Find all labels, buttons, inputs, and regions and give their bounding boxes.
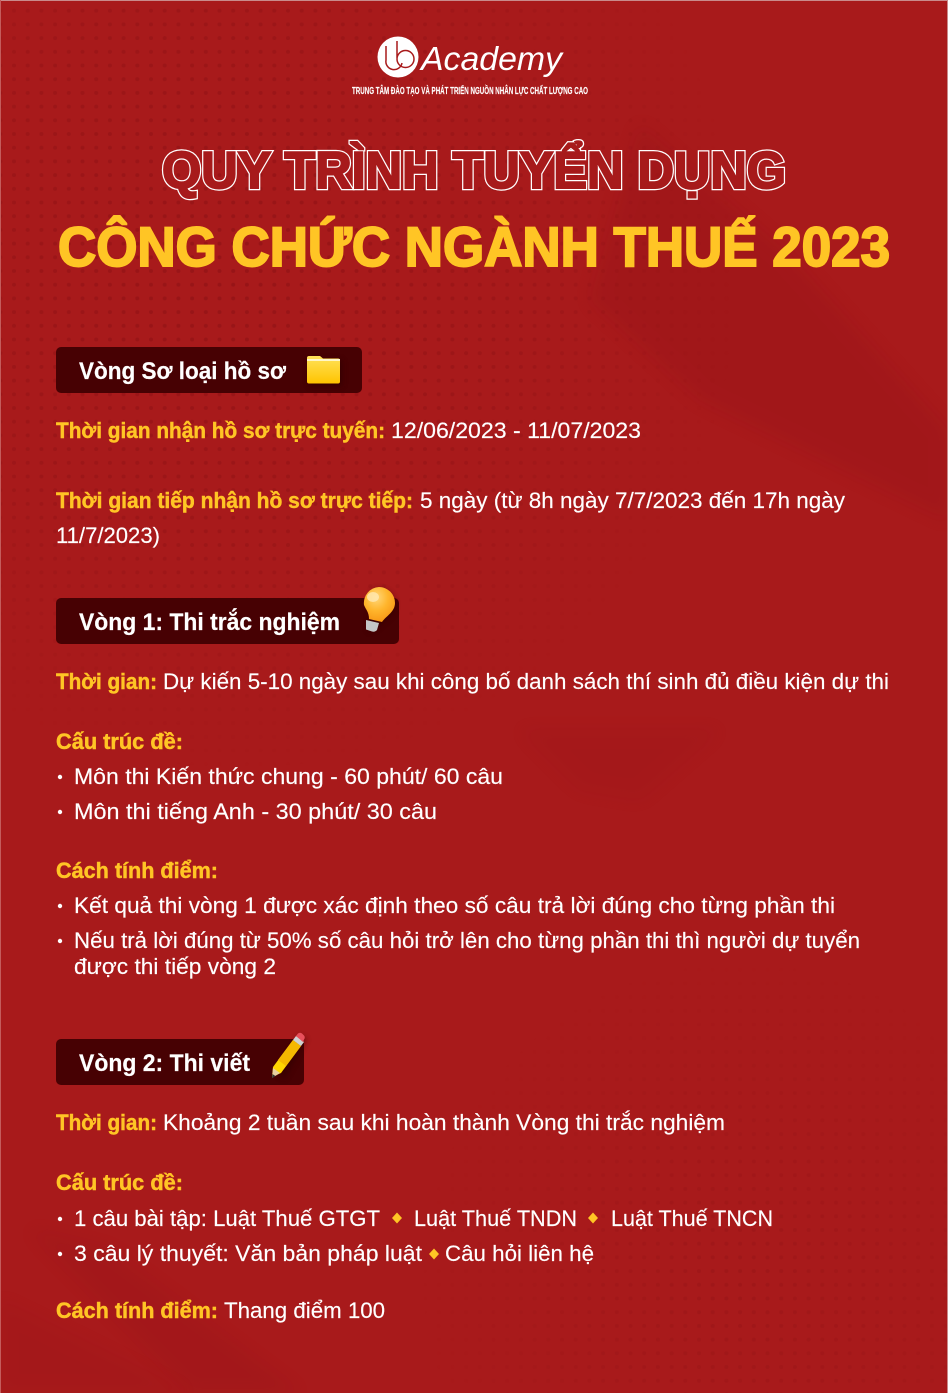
icon: pencil <box>272 1033 307 1079</box>
text: time: Thời gian: <box>56 669 157 694</box>
logo mark <box>378 36 418 78</box>
text: exam structure: Luật Thuế TNDN <box>414 1206 577 1231</box>
panel: vòng 1 <box>56 587 889 979</box>
heading badge: Vòng 1: Thi trắc nghiệm <box>79 608 340 636</box>
text: exam structure <box>56 729 503 824</box>
text: online application: Thời gian nhận hồ sơ trực tuyến: <box>56 418 385 443</box>
text: direct application: Thời gian tiếp nhận hồ sơ trực tiếp: <box>56 488 413 513</box>
text: scoring: Thang điểm 100 <box>224 1298 385 1323</box>
text: scoring <box>56 858 860 979</box>
logo wordmark: Academy <box>419 40 565 77</box>
title line 2: CÔNG CHỨC NGÀNH THUẾ 2023 <box>58 215 890 278</box>
text: online application: 12/06/2023 - 11/07/2023 <box>391 418 641 443</box>
text: exam structure: Môn thi Kiến thức chung - 60 phút/ 60 câu <box>74 764 503 789</box>
title line 1: QUY TRÌNH TUYỂN DỤNG <box>162 141 786 200</box>
text: exam structure: Luật Thuế TNCN <box>611 1206 773 1231</box>
text: time: Dự kiến 5-10 ngày sau khi công bố danh sách thí sinh đủ điều kiện dự thi <box>163 669 889 694</box>
text: exam structure <box>56 1170 773 1266</box>
text: direct application: 5 ngày (từ 8h ngày 7/7/2023 đến 17h ngày <box>420 488 845 513</box>
text: scoring: Cách tính điểm: <box>56 858 218 883</box>
text: direct application <box>56 488 845 548</box>
panel: vòng sơ loại hồ sơ <box>56 347 845 548</box>
text: exam structure: Cấu trúc đề: <box>56 1170 183 1195</box>
logo tagline: TRUNG TÂM ĐÀO TẠO VÀ PHÁT TRIỂN NGUỒN NHÂN LỰC CHẤT LƯỢNG CAO <box>352 84 588 97</box>
text: scoring: được thi tiếp vòng 2 <box>74 954 276 979</box>
panel: vòng 2 <box>56 1033 773 1323</box>
icon: folder <box>307 356 342 386</box>
text: scoring: Cách tính điểm: <box>56 1298 218 1323</box>
title line 1: QUY TRÌNH TUYỂN DỤNG <box>162 141 786 200</box>
heading badge <box>56 347 362 393</box>
text: scoring: Kết quả thi vòng 1 được xác định theo số câu trả lời đúng cho từng phần thi <box>74 893 835 918</box>
text: exam structure: 1 câu bài tập: Luật Thuế GTGT <box>74 1206 380 1231</box>
text: direct application: 11/7/2023) <box>56 523 160 548</box>
heading badge <box>56 598 399 644</box>
text: exam structure: Câu hỏi liên hệ <box>445 1241 594 1266</box>
logo <box>352 36 588 97</box>
title <box>58 141 890 278</box>
text: scoring: Nếu trả lời đúng từ 50% số câu hỏi trở lên cho từng phần thi thì người dự tuyển <box>74 928 860 953</box>
heading badge: Vòng Sơ loại hồ sơ <box>79 358 287 385</box>
text: scoring <box>56 1298 385 1323</box>
text: exam structure: 3 câu lý thuyết: Văn bản pháp luật <box>74 1241 422 1266</box>
text: time: Thời gian: <box>56 1110 157 1135</box>
heading badge: Vòng 2: Thi viết <box>79 1050 250 1077</box>
text: online application <box>56 418 641 443</box>
text: time: Khoảng 2 tuần sau khi hoàn thành Vòng thi trắc nghiệm <box>163 1110 725 1135</box>
text: exam structure: Môn thi tiếng Anh - 30 phút/ 30 câu <box>74 799 437 824</box>
icon: light bulb <box>364 587 395 632</box>
heading badge <box>56 1039 304 1085</box>
text: exam structure: Cấu trúc đề: <box>56 729 183 754</box>
